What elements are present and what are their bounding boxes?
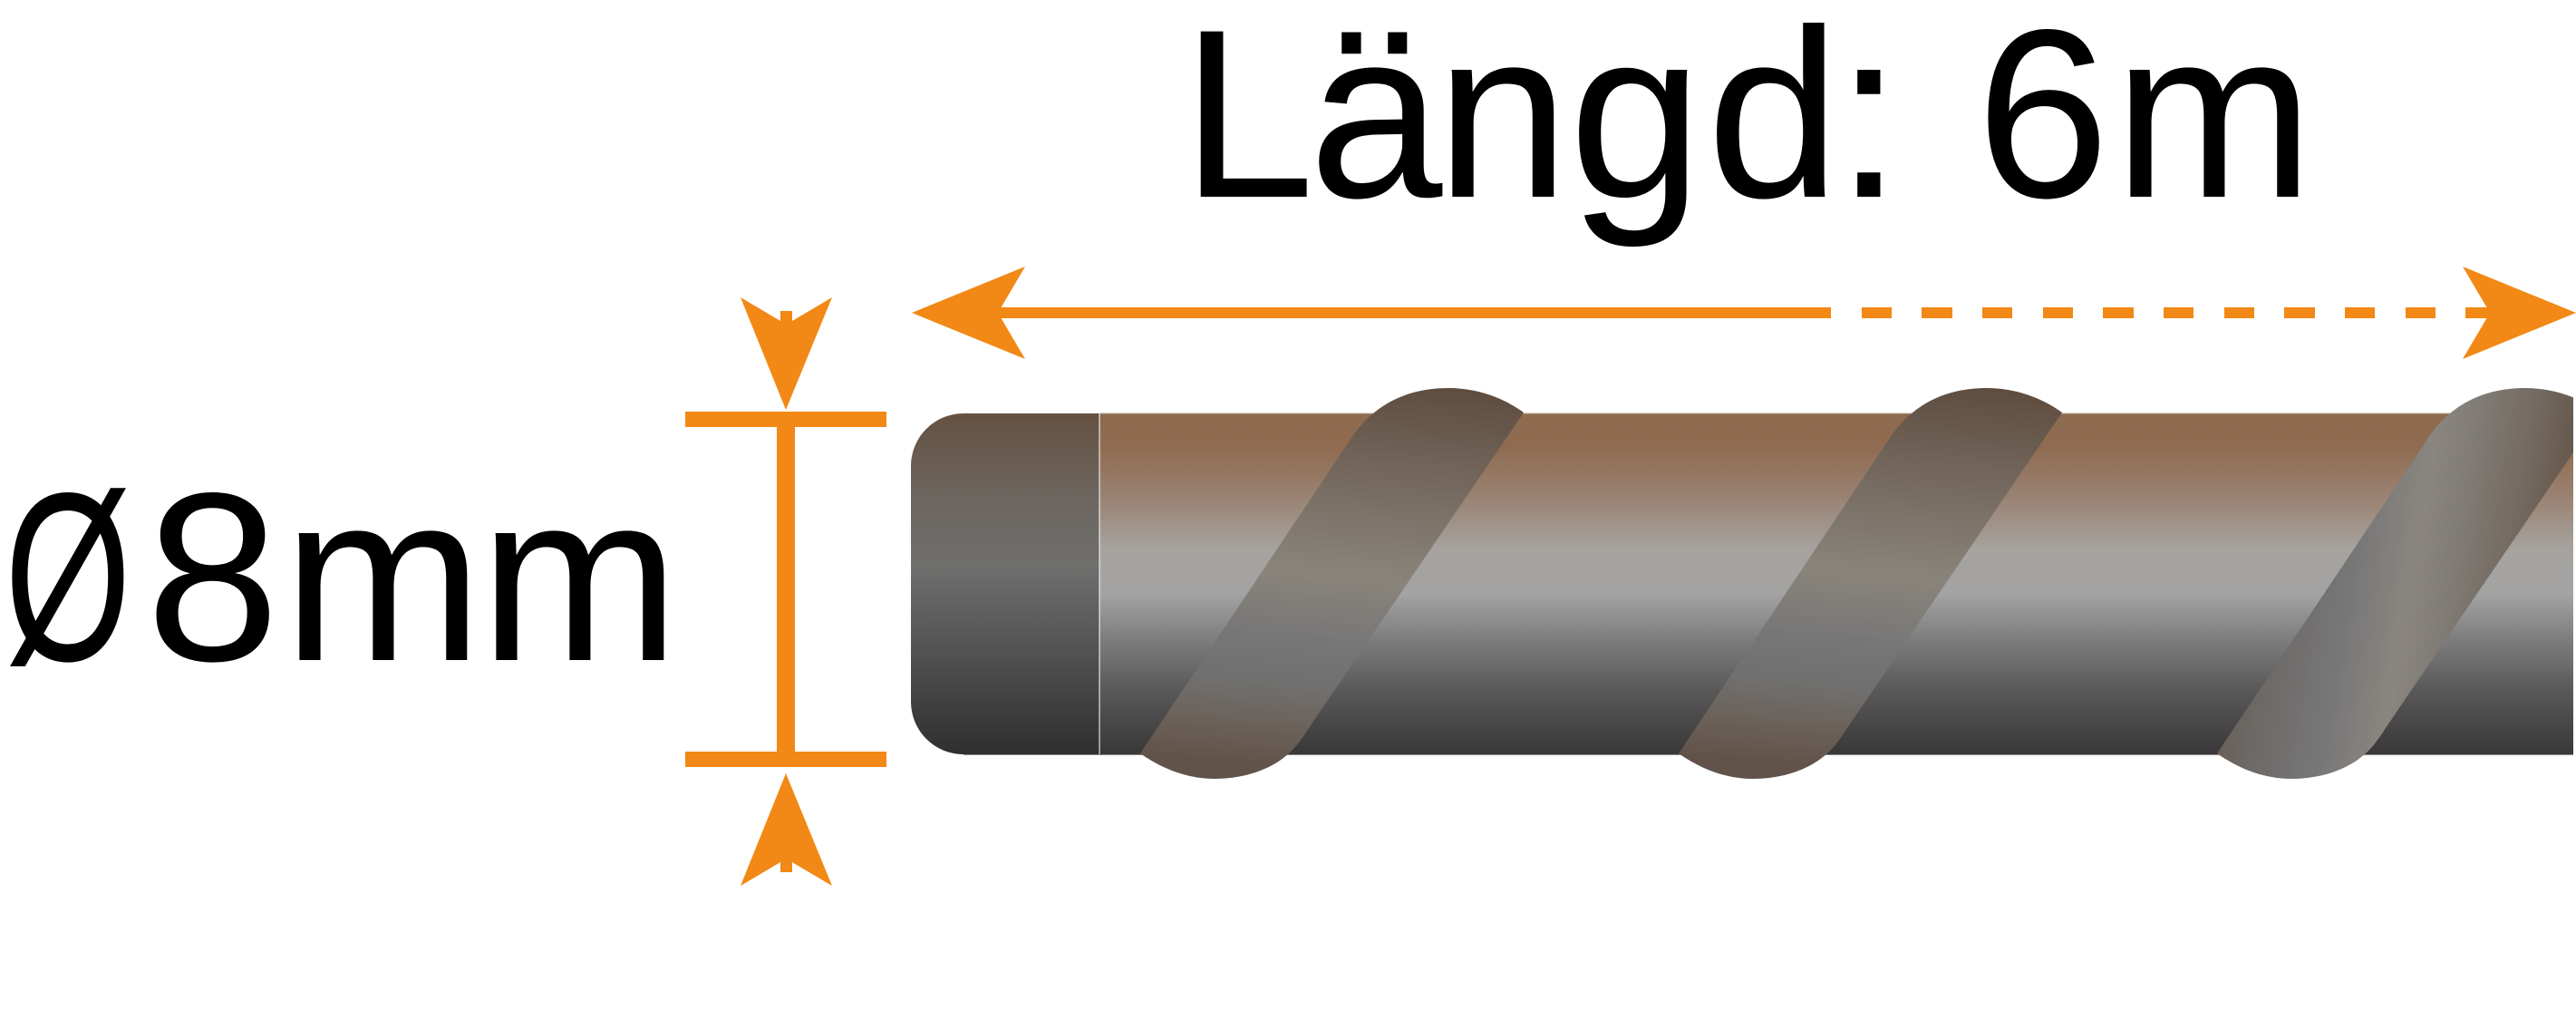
diameter label: Ø <box>5 443 131 712</box>
diameter label: 8mm <box>146 443 680 712</box>
rib 2 <box>1679 388 2062 779</box>
arrow: length dimension <box>912 267 2576 359</box>
arrow: diameter dimension <box>685 297 886 886</box>
rod body <box>1100 413 2573 754</box>
rib 1 <box>1140 388 1524 779</box>
rod end cap <box>911 413 1099 754</box>
rebar rod <box>911 388 2576 779</box>
rib 3 <box>2217 388 2576 779</box>
